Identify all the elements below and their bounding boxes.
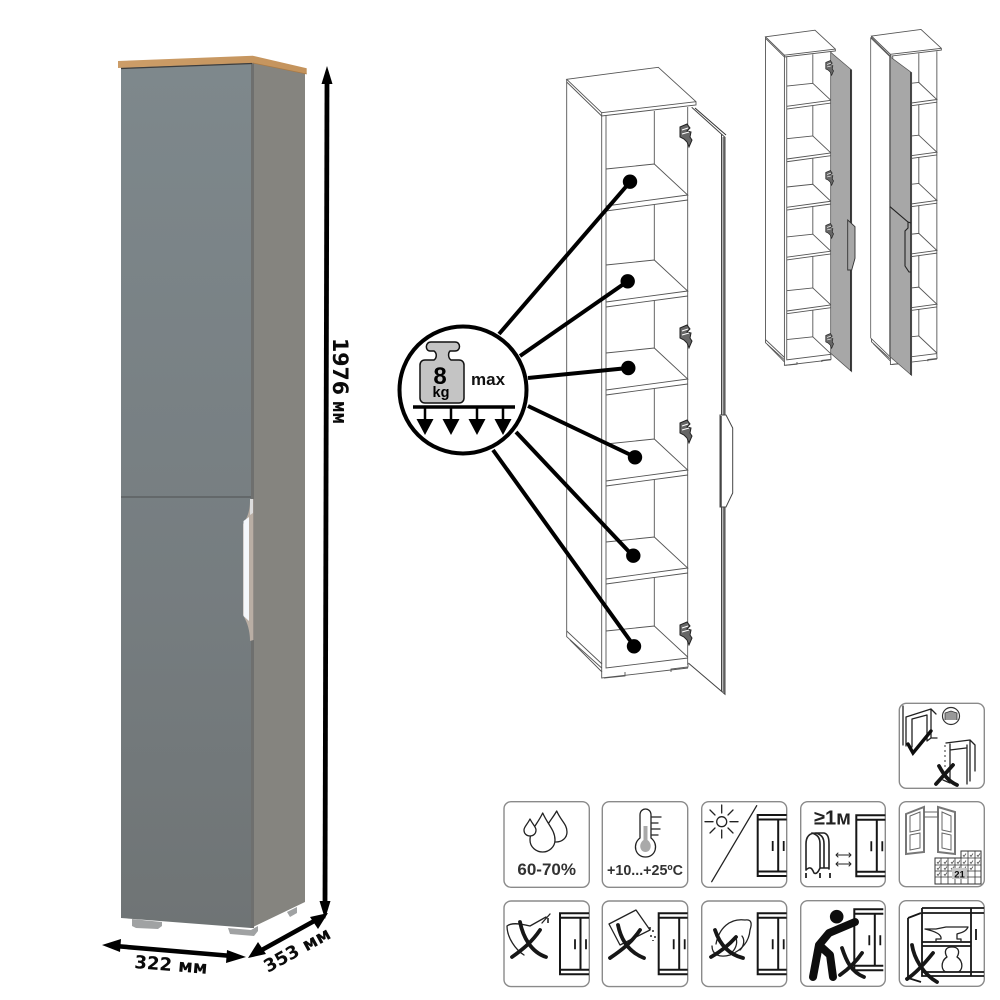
icon: shelf overload bbox=[899, 901, 984, 986]
closed grey doors bbox=[871, 38, 912, 376]
photo: grey cabinet bbox=[118, 56, 307, 936]
cabinet carcass bbox=[567, 67, 696, 678]
cabinet door edge bbox=[250, 62, 254, 928]
handle bbox=[243, 499, 254, 641]
icon: temperature: +10...+25ºC bbox=[607, 863, 683, 879]
hinges bbox=[680, 124, 692, 645]
arrow: depth dimension bbox=[248, 913, 328, 958]
line drawing: small open cabinet with grey door bbox=[766, 30, 855, 372]
care icons bbox=[504, 703, 984, 987]
label: depth: 353 мм bbox=[260, 923, 335, 977]
icon: do not push bbox=[801, 901, 885, 986]
small hinges bbox=[826, 60, 834, 348]
feet bbox=[132, 907, 297, 936]
line drawing: open cabinet bbox=[567, 67, 733, 694]
icon: temperature bbox=[602, 802, 688, 887]
icon: distance from heater bbox=[801, 802, 885, 887]
icon: humidity bbox=[504, 802, 589, 887]
label: height: мм bbox=[328, 401, 352, 424]
icon: acclimatise 21 days bbox=[899, 802, 984, 887]
icon: distance from heater: ≥1м bbox=[814, 808, 851, 830]
label: width: 322 мм bbox=[134, 952, 208, 979]
icon: no oils bbox=[504, 901, 589, 987]
callout: 8 kg max per shelf bbox=[400, 326, 526, 454]
label: height: 1976 bbox=[328, 338, 352, 395]
cabinet front doors bbox=[121, 62, 251, 928]
cabinet side panel bbox=[250, 62, 305, 928]
arrow: height dimension bbox=[320, 66, 332, 919]
icon: no abrasive cloth bbox=[702, 901, 787, 987]
weight unit: kg bbox=[433, 385, 449, 401]
max label: max bbox=[471, 370, 506, 389]
callout lines to shelves bbox=[493, 176, 640, 652]
icon: acclimatise 21 days: 21 bbox=[954, 870, 965, 880]
icon: weight bbox=[420, 342, 464, 403]
door split bbox=[121, 496, 251, 498]
arrow: width dimension bbox=[102, 939, 246, 963]
grey door bbox=[831, 52, 855, 372]
label: height bbox=[328, 338, 352, 424]
wood top bbox=[118, 56, 307, 74]
weight value: 8 bbox=[433, 363, 447, 390]
icon: no powder bbox=[602, 901, 688, 987]
line drawing: small closed cabinet bbox=[871, 29, 941, 375]
icon: assembly check bbox=[899, 703, 984, 788]
icon: humidity: 60-70% bbox=[517, 860, 576, 879]
open door bbox=[688, 107, 733, 694]
load arrows bbox=[413, 407, 515, 435]
icon: no sunlight bbox=[702, 802, 787, 887]
